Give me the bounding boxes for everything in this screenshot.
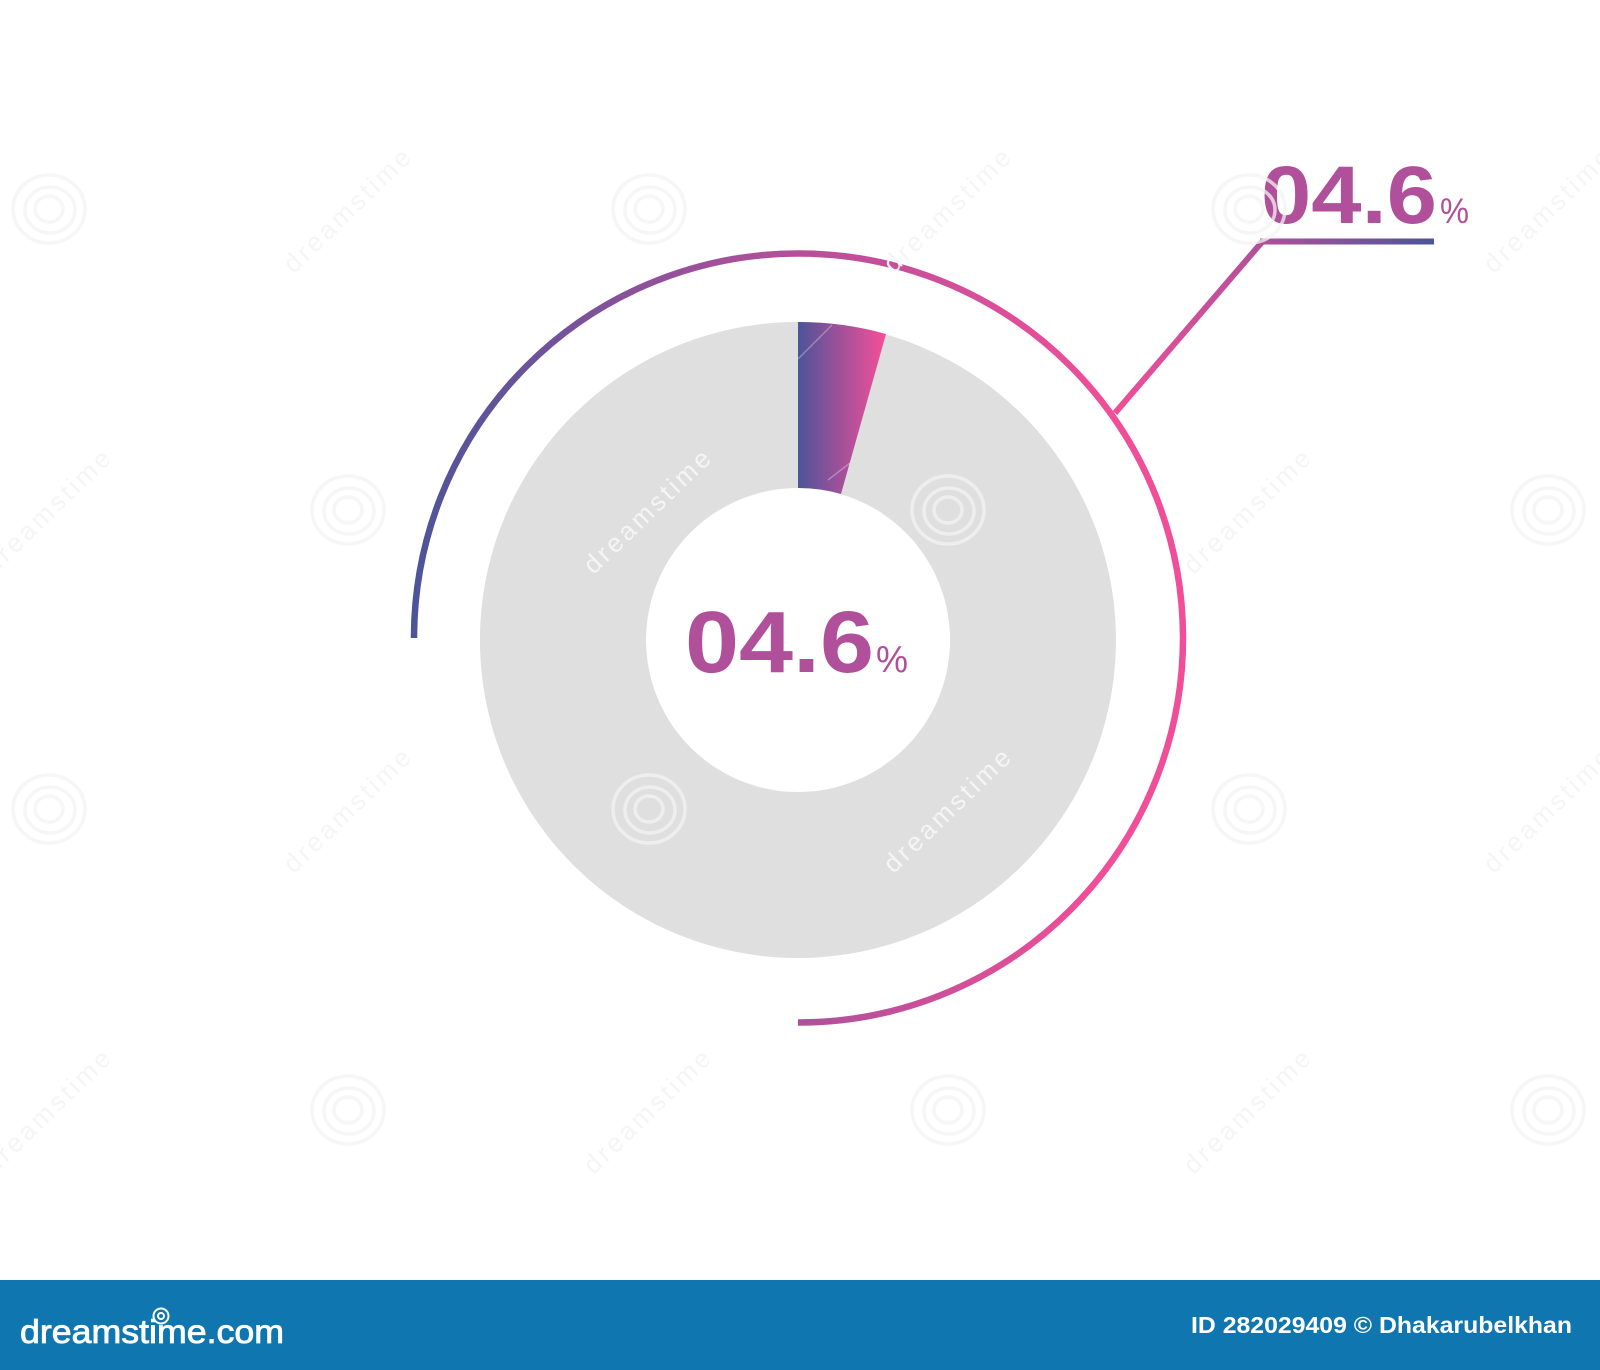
watermark pattern: dreamstime — [877, 742, 1017, 879]
watermark pattern: dreamstime — [277, 742, 417, 879]
footer logo spiral — [154, 1308, 168, 1324]
callout value: 04.6 — [1261, 150, 1437, 241]
watermark pattern: dreamstime — [577, 443, 717, 580]
watermark pattern: dreamstime — [1177, 443, 1317, 580]
watermark pattern: dreamstime — [1177, 1043, 1317, 1180]
leader line callout — [1115, 242, 1434, 413]
footer bar — [0, 1280, 1600, 1370]
donut chart — [480, 322, 1116, 958]
center value: % — [876, 639, 908, 681]
callout value: % — [1440, 192, 1469, 231]
footer logo text: dreamstime.com — [20, 1313, 284, 1350]
center value: 04.6 — [685, 594, 874, 691]
watermark pattern: dreamstime — [277, 142, 417, 279]
watermark pattern: dreamstime — [577, 1043, 717, 1180]
highlighted slice 4.6% — [798, 322, 886, 494]
outer gradient arc — [414, 254, 1183, 1023]
watermark pattern: dreamstime — [877, 142, 1017, 279]
footer credit: ID 282029409 © Dhakarubelkhan — [1191, 1312, 1572, 1338]
donut track — [480, 322, 1116, 958]
watermark pattern — [0, 142, 1600, 1180]
